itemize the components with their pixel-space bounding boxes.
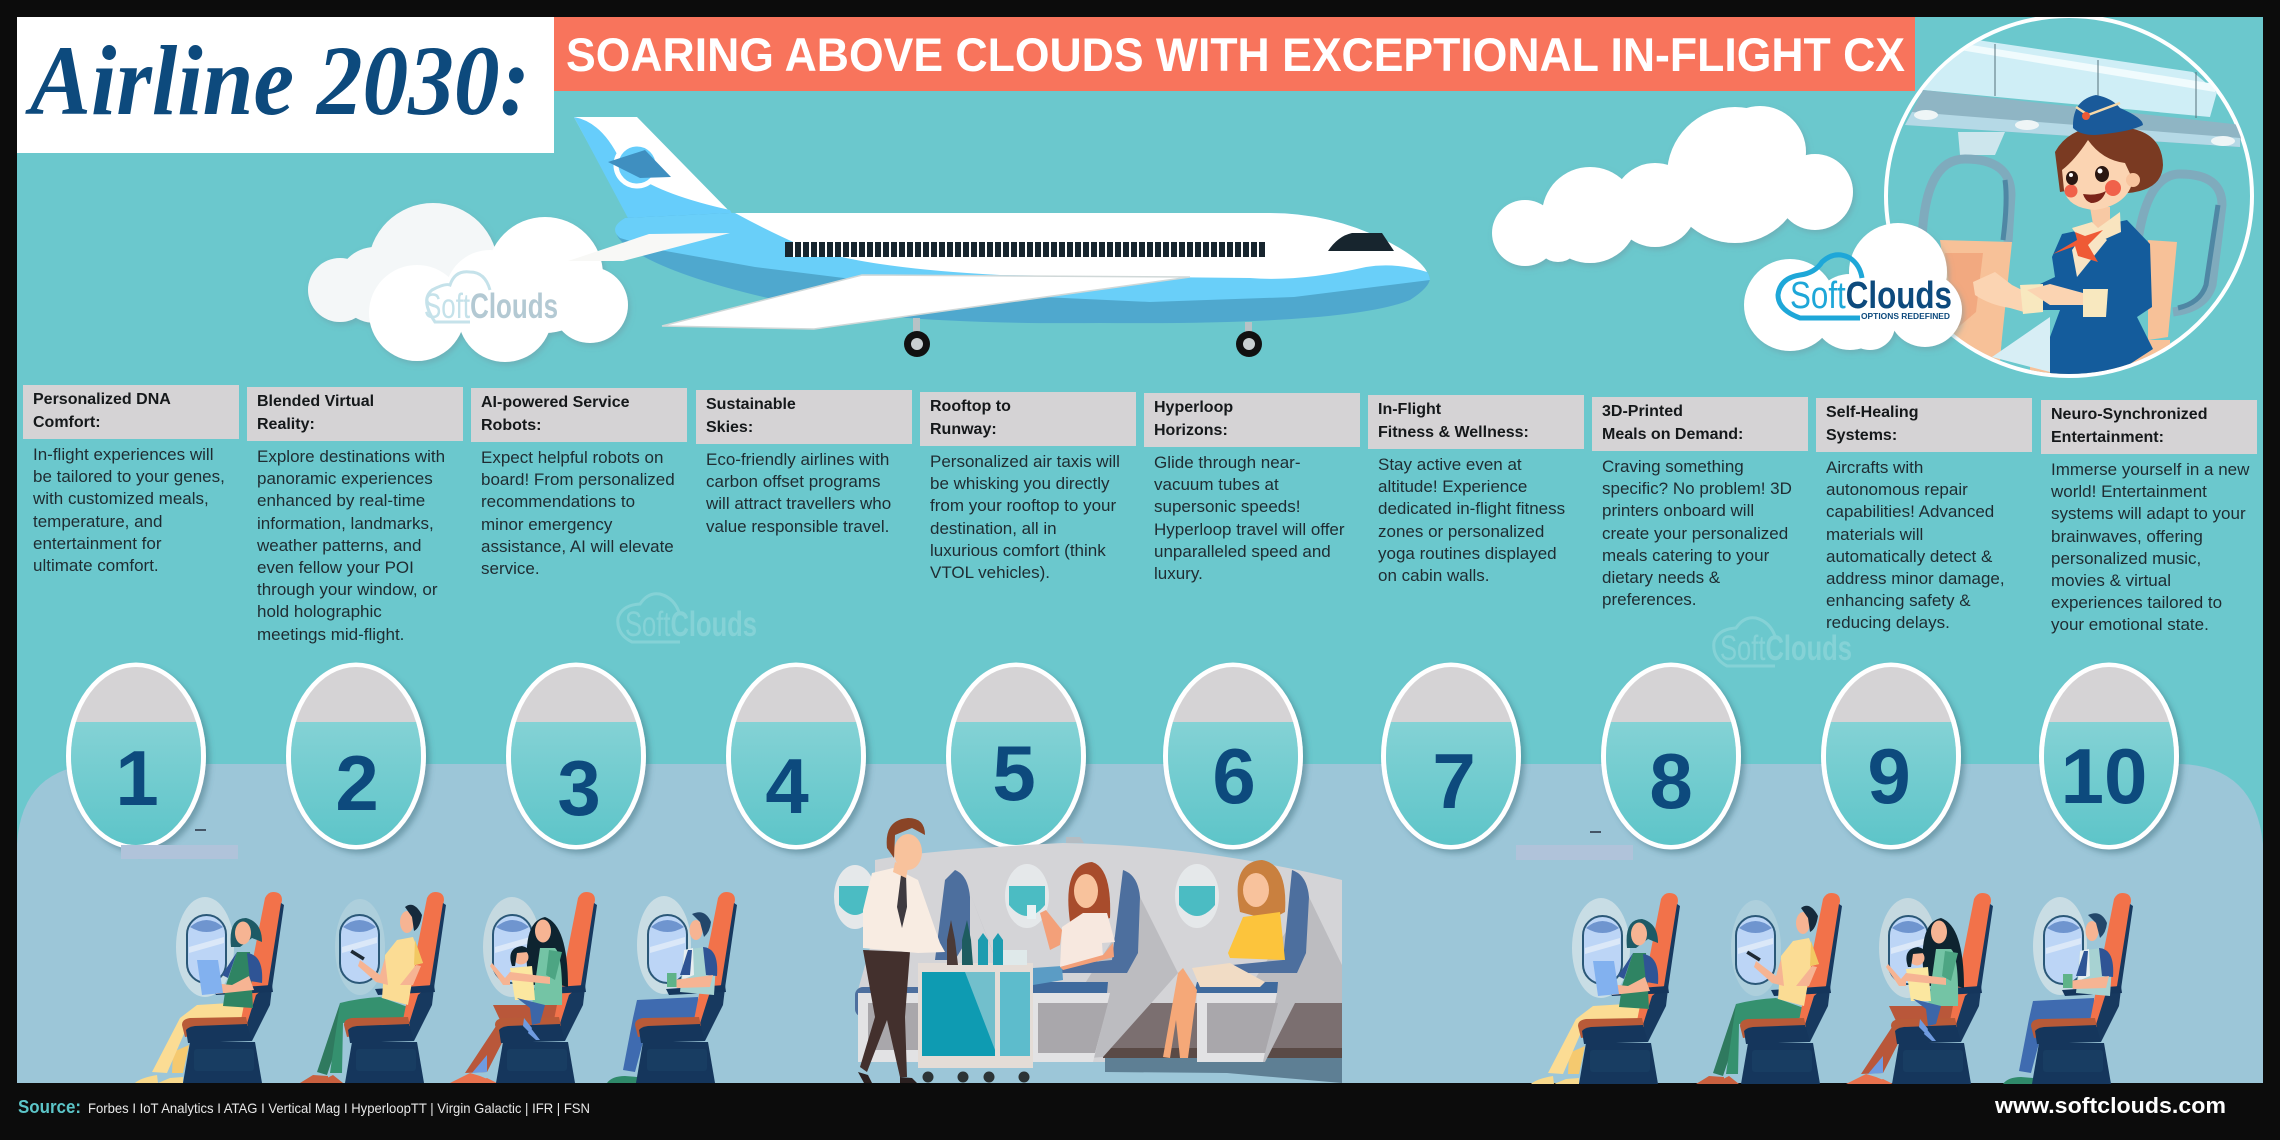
text 2: information, landmarks, (257, 514, 434, 533)
text 9: capabilities! Advanced (1826, 502, 1994, 521)
text 10: world! Entertainment (2051, 482, 2207, 501)
window number 6 (1163, 661, 1303, 852)
hat (2073, 95, 2143, 135)
attendant uniform (2040, 220, 2153, 375)
text 6: supersonic speeds! (1154, 497, 1300, 516)
heading 1: Comfort: (33, 414, 101, 431)
website url: www.softclouds.com (1994, 1093, 2226, 1118)
text 7: yoga routines displayed (1378, 544, 1557, 563)
panel: item 5 (920, 392, 1136, 582)
flight attendant circle (1886, 16, 2252, 376)
heading 10 (2041, 400, 2257, 454)
text 7 (1378, 455, 1565, 585)
panel: item 9 (1816, 398, 2032, 632)
tail fin (574, 117, 734, 220)
text 10: systems will adapt to your (2051, 504, 2246, 523)
text 4: will attract travellers who (706, 494, 891, 513)
heading 5: Runway: (930, 421, 997, 438)
text 9: materials will (1826, 525, 1923, 544)
drinks cart (918, 920, 1033, 1082)
text 9: reducing delays. (1826, 613, 1950, 632)
text 3: service. (481, 559, 540, 578)
window number 10 (2039, 661, 2179, 852)
window number 4: 4 (765, 742, 809, 830)
text 8: dietary needs & (1602, 568, 1720, 587)
window number 2 (286, 661, 426, 852)
watermark 1 (618, 594, 757, 644)
text 9: address minor damage, (1826, 569, 2005, 588)
hair (2055, 127, 2163, 193)
text 6: unparalleled speed and (1154, 542, 1331, 561)
left lilac bar (121, 845, 238, 859)
text 9: automatically detect & (1826, 547, 1992, 566)
peach seats (1940, 240, 2012, 357)
panel: item 8 (1592, 397, 1808, 609)
subtitle banner: SOARING ABOVE CLOUDS WITH EXCEPTIONAL IN-FLIGHT CX (566, 28, 1905, 81)
heading 1 (23, 385, 239, 439)
heading 8 (1592, 397, 1808, 451)
heading 3: Robots: (481, 417, 541, 434)
text 10: experiences tailored to (2051, 593, 2222, 612)
text 2: meetings mid-flight. (257, 625, 404, 644)
heading 6 (1144, 393, 1360, 447)
cockpit window (1328, 233, 1394, 251)
text 9: enhancing safety & (1826, 591, 1971, 610)
text 5: VTOL vehicles). (930, 563, 1050, 582)
text 7: zones or personalized (1378, 522, 1544, 541)
text 5: Personalized air taxis will (930, 452, 1120, 471)
text 4 (706, 450, 891, 536)
window 2 (1005, 864, 1049, 928)
heading 4: Skies: (706, 419, 753, 436)
watermark 2 (1714, 618, 1852, 668)
heading 9: Systems: (1826, 427, 1897, 444)
window number 10: 10 (2061, 732, 2147, 820)
panel: item 7 (1368, 395, 1584, 585)
text 9: autonomous repair (1826, 480, 1968, 499)
text 5: destination, all in (930, 519, 1057, 538)
airplane (568, 117, 1430, 357)
window number 5 (946, 661, 1086, 852)
heading 5: Rooftop to (930, 398, 1011, 415)
text 2: panoramic experiences (257, 469, 433, 488)
heading 9: Self-Healing (1826, 404, 1918, 421)
text 3: minor emergency (481, 515, 612, 534)
text 9: Aircrafts with (1826, 458, 1923, 477)
heading 10: Neuro-Synchronized (2051, 406, 2207, 423)
heading 3 (471, 388, 687, 442)
title box: Airline 2030: (25, 25, 530, 136)
heading 1: Personalized DNA (33, 391, 171, 408)
window 1 (834, 865, 871, 929)
heading 4: Sustainable (706, 396, 796, 413)
seats (855, 870, 1309, 1062)
heading 6: Hyperloop (1154, 399, 1233, 416)
heading 5 (920, 392, 1136, 446)
source text: Source: (18, 1097, 81, 1117)
text 6 (1154, 453, 1345, 583)
text 10: your emotional state. (2051, 615, 2209, 634)
floor (1103, 1003, 1342, 1048)
text 8: specific? No problem! 3D (1602, 479, 1792, 498)
panel: item 4 (696, 390, 912, 536)
text 6: Glide through near- (1154, 453, 1300, 472)
heading 7: In-Flight (1378, 401, 1441, 418)
left passengers row (135, 892, 737, 1083)
text 5: from your rooftop to your (930, 496, 1116, 515)
text 4: value responsible travel. (706, 517, 889, 536)
text 5 (930, 452, 1120, 582)
text 8 (1602, 457, 1792, 609)
text 7: on cabin walls. (1378, 566, 1490, 585)
text 1: temperature, and (33, 512, 162, 531)
text 7: altitude! Experience (1378, 477, 1527, 496)
text 8: meals catering to your (1602, 546, 1769, 565)
text 2: even fellow your POI (257, 558, 414, 577)
woman in white (1027, 862, 1115, 985)
text 10 (2051, 460, 2250, 634)
text 10: movies & virtual (2051, 571, 2171, 590)
logo cloud (1744, 223, 1962, 351)
cabin window frames (1922, 159, 2011, 242)
text 6: luxury. (1154, 564, 1203, 583)
hands (1973, 272, 2024, 312)
text 5: be whisking you directly (930, 474, 1110, 493)
text 1 (33, 445, 225, 575)
stabilizer (568, 233, 730, 261)
text 6: Hyperloop travel will offer (1154, 520, 1345, 539)
window number 9: 9 (1867, 732, 1911, 820)
text 1: with customized meals, (33, 489, 209, 508)
panel: item 10 (2041, 400, 2257, 634)
text 1: be tailored to your genes, (33, 467, 225, 486)
text 2: Explore destinations with (257, 447, 445, 466)
heading 8: 3D-Printed (1602, 403, 1683, 420)
panel: item 1 (23, 385, 239, 575)
heading 4 (696, 390, 912, 444)
text 2: through your window, or (257, 580, 438, 599)
left clouds with watermark (308, 203, 628, 362)
panel: item 6 (1144, 393, 1360, 583)
fuselage (615, 213, 1430, 323)
window number 6: 6 (1212, 732, 1256, 820)
panel: item 3 (471, 388, 687, 578)
text 3: Expect helpful robots on (481, 448, 663, 467)
right cloud (1492, 106, 1853, 266)
source text: Forbes I IoT Analytics I ATAG I Vertical Mag I HyperloopTT | Virgin Galactic | IFR | FSN (88, 1100, 590, 1116)
window number 3: 3 (557, 744, 601, 832)
cabin wall (858, 843, 1342, 1062)
text 6: vacuum tubes at (1154, 475, 1279, 494)
heading 2 (247, 387, 463, 441)
seat shadows (982, 926, 993, 952)
overhead rail (1905, 90, 2242, 147)
steward (858, 818, 945, 1083)
window number 1 (66, 661, 206, 852)
watermark 2: SoftClouds (1720, 629, 1852, 668)
text 1: In-flight experiences will (33, 445, 213, 464)
landing gear (904, 318, 1262, 357)
cabin windows (785, 242, 1265, 257)
heading 7: Fitness & Wellness: (1378, 424, 1529, 441)
text 3 (481, 448, 675, 578)
text 4: Eco-friendly airlines with (706, 450, 889, 469)
window number 7: 7 (1432, 737, 1476, 825)
text 10: Immerse yourself in a new (2051, 460, 2249, 479)
window number 2: 2 (335, 739, 379, 827)
text 4: carbon offset programs (706, 472, 880, 491)
right lilac bar (1516, 845, 1633, 860)
window number 9 (1821, 661, 1961, 852)
text 1: entertainment for (33, 534, 162, 553)
text 2: hold holographic (257, 602, 382, 621)
source text (18, 1097, 590, 1117)
text 7: Stay active even at (1378, 455, 1522, 474)
text 7: dedicated in-flight fitness (1378, 499, 1565, 518)
text 3: board! From personalized (481, 470, 675, 489)
text 9 (1826, 458, 2005, 632)
lower cabin band (17, 764, 2263, 1083)
heading 10: Entertainment: (2051, 429, 2164, 446)
text 10: brainwaves, offering (2051, 527, 2203, 546)
heading 2: Blended Virtual (257, 393, 374, 410)
right passengers row (1531, 893, 2133, 1084)
face (2062, 140, 2133, 210)
window number 4 (726, 661, 866, 852)
text 10: personalized music, (2051, 549, 2201, 568)
window number 3 (506, 661, 646, 852)
heading 2: Reality: (257, 416, 315, 433)
text 3: assistance, AI will elevate (481, 537, 674, 556)
logo: OPTIONS REDEFINED (1861, 312, 1950, 321)
center cabin scene with steward (834, 818, 1342, 1083)
woman in yellow (1163, 860, 1285, 1058)
wing (662, 275, 1190, 329)
heading 3: AI-powered Service (481, 394, 630, 411)
heading 8: Meals on Demand: (1602, 426, 1743, 443)
watermark 1: SoftClouds (625, 605, 757, 644)
window number 8 (1601, 661, 1741, 852)
scarf (2053, 230, 2103, 262)
panel: item 2 (247, 387, 463, 644)
text 3: recommendations to (481, 492, 635, 511)
heading 9 (1816, 398, 2032, 452)
window number 7 (1381, 661, 1521, 852)
text 8: printers onboard will (1602, 501, 1754, 520)
subtitle banner (554, 17, 1915, 91)
window number 8: 8 (1649, 737, 1693, 825)
window 3 (1175, 864, 1219, 928)
left clouds with watermark: SoftClouds (424, 287, 558, 326)
logo (1778, 255, 1952, 321)
text 2 (257, 447, 445, 644)
text 8: Craving something (1602, 457, 1744, 476)
text 1: ultimate comfort. (33, 556, 159, 575)
overhead bin (1923, 40, 2217, 117)
text 5: luxurious comfort (think (930, 541, 1106, 560)
window number 5: 5 (992, 729, 1036, 817)
heading 6: Horizons: (1154, 422, 1228, 439)
window number 1: 1 (115, 734, 159, 822)
text 2: weather patterns, and (257, 536, 421, 555)
logo: SoftClouds (1790, 275, 1952, 317)
heading 7 (1368, 395, 1584, 449)
text 8: create your personalized (1602, 524, 1788, 543)
text 2: enhanced by real-time (257, 491, 425, 510)
text 8: preferences. (1602, 590, 1696, 609)
